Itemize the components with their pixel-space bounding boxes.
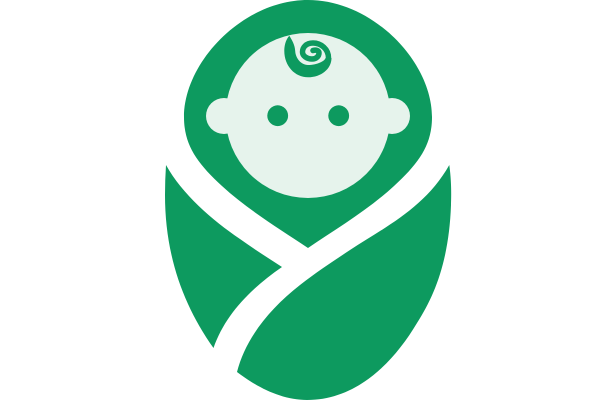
left ear: [206, 98, 242, 134]
right eye: [328, 105, 349, 126]
eyes: [267, 105, 349, 126]
right ear: [374, 98, 410, 134]
left eye: [267, 105, 288, 126]
left swaddle wing: [165, 165, 282, 348]
baby head: [206, 33, 410, 198]
head wrap: green teardrop hood: [184, 0, 432, 248]
right swaddle wing: [237, 165, 451, 400]
curl spiral: [302, 43, 328, 59]
hair curl: [284, 36, 332, 77]
curl tail: [284, 36, 332, 77]
face: [226, 33, 390, 198]
